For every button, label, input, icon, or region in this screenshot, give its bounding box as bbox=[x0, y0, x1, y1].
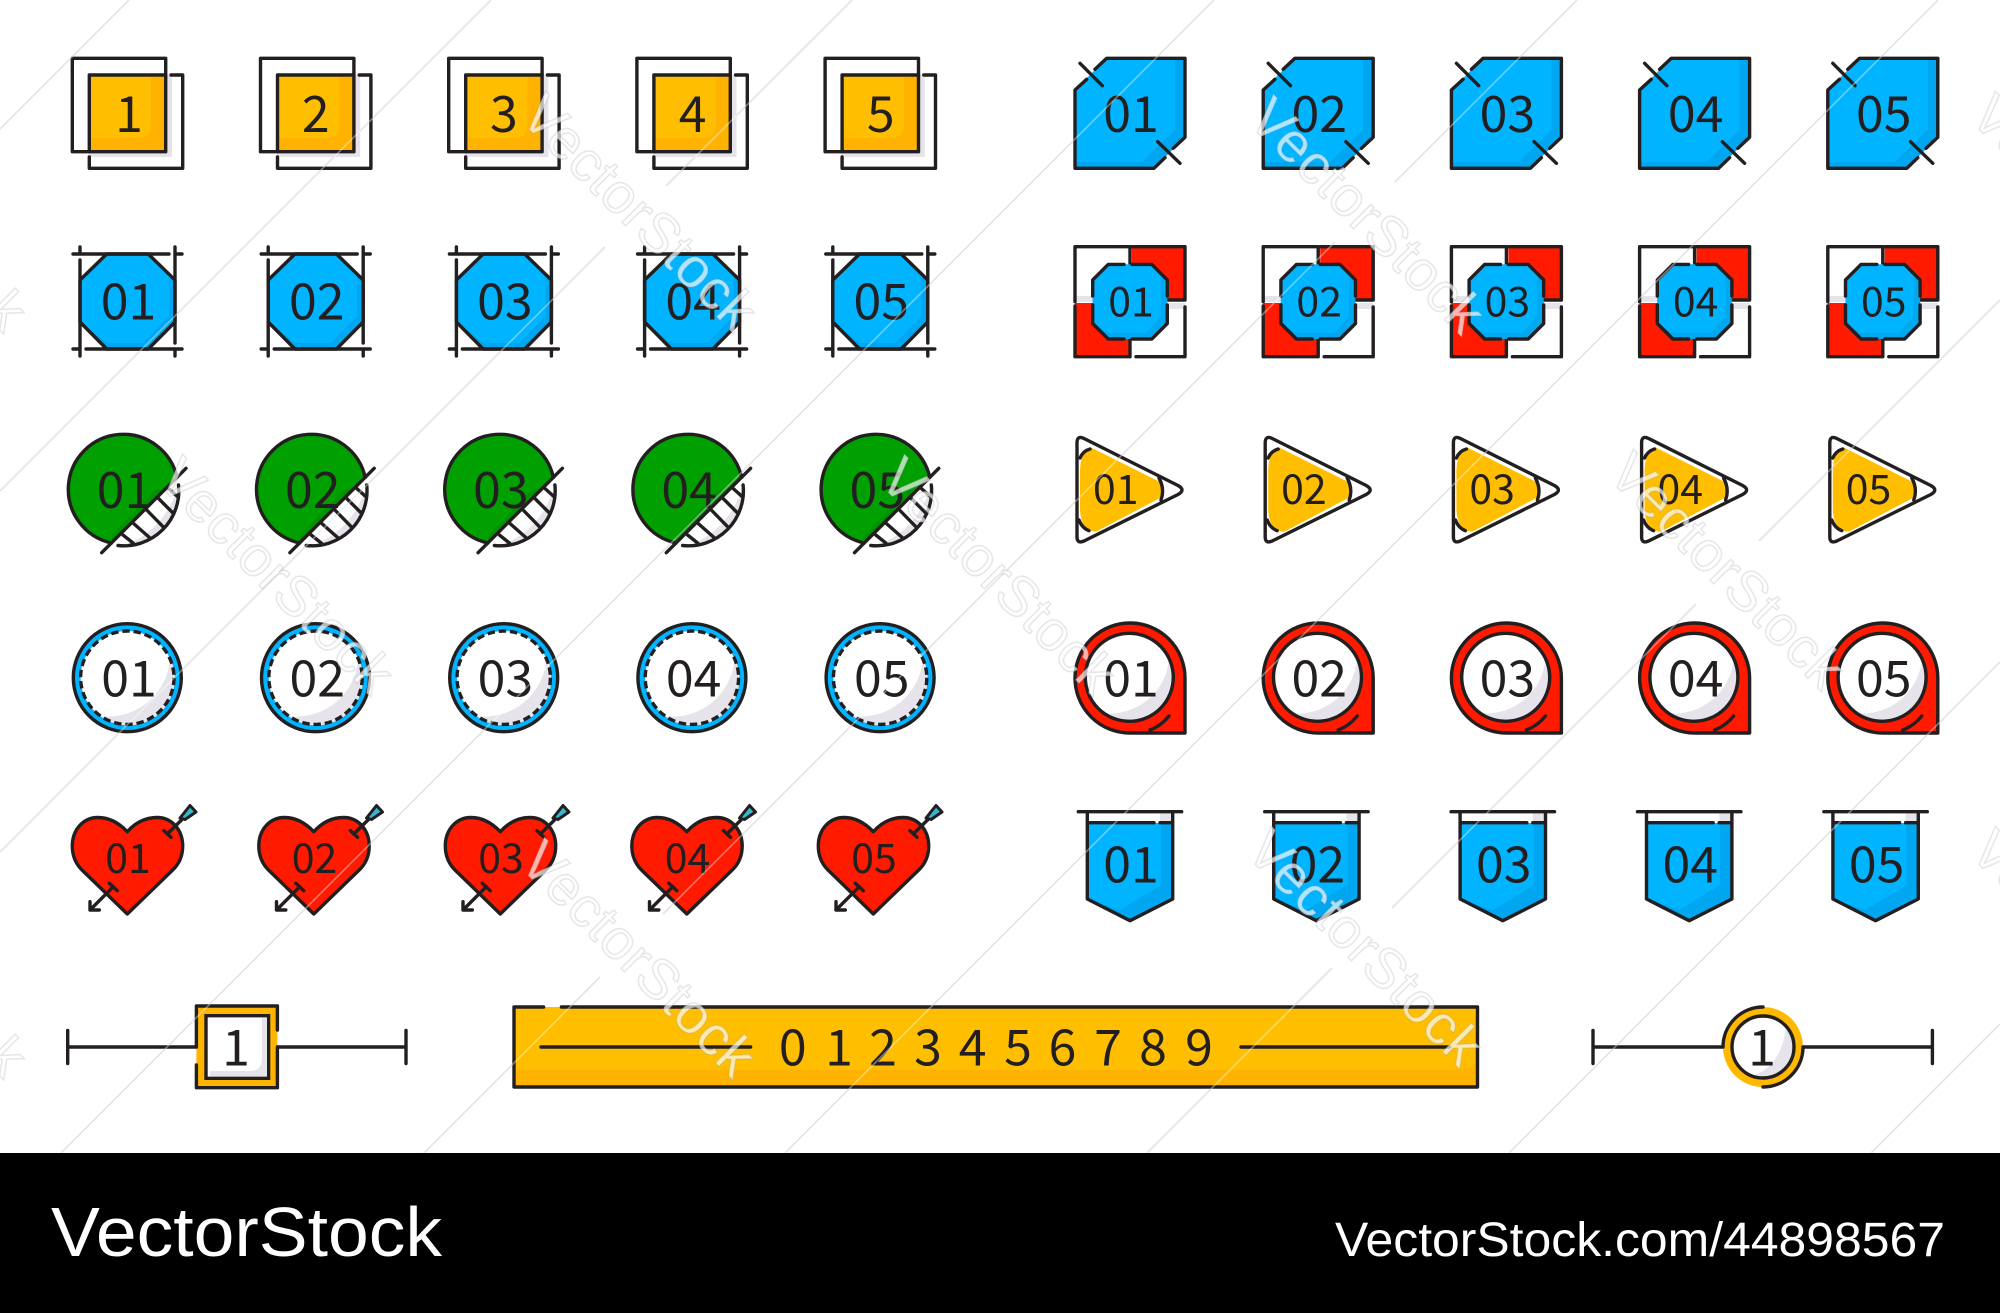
heart 01 bbox=[72, 806, 196, 914]
cut square 04: 04 bbox=[1668, 75, 1723, 147]
dashed circle 04: 04 bbox=[666, 640, 721, 712]
bookmark 05 bbox=[1824, 812, 1927, 921]
quadrant badge 02 bbox=[1263, 247, 1373, 357]
bar: amber digits: 8 bbox=[1139, 1009, 1167, 1081]
badge 5 bbox=[825, 58, 936, 168]
heart 03: 03 bbox=[478, 825, 524, 885]
badge 4: 4 bbox=[679, 75, 706, 147]
quadrant badge 04: 04 bbox=[1673, 268, 1718, 328]
triangle 04: 04 bbox=[1658, 456, 1703, 516]
green circle 02: 02 bbox=[285, 451, 340, 523]
badge 1: 1 bbox=[115, 75, 143, 147]
bar: amber digits: 7 bbox=[1094, 1009, 1122, 1081]
dashed circle 05: 05 bbox=[854, 640, 910, 712]
bookmark 02: 02 bbox=[1290, 825, 1345, 897]
panel: dashed blue circles bbox=[73, 624, 934, 732]
quadrant badge 03: 03 bbox=[1485, 268, 1530, 328]
badge 2: 2 bbox=[302, 75, 330, 147]
cut square 02: 02 bbox=[1291, 75, 1347, 147]
badge 2 bbox=[260, 58, 371, 168]
dashed circle 03: 03 bbox=[478, 640, 533, 712]
bar: amber digits: 1 bbox=[825, 1009, 853, 1081]
footer image id: VectorStock.com/44898567 bbox=[1335, 1214, 1945, 1267]
triangle 01: 01 bbox=[1093, 456, 1138, 516]
heart 05: 05 bbox=[851, 825, 897, 885]
dashed circle 03 bbox=[450, 624, 558, 732]
heart 03 bbox=[445, 806, 569, 914]
cut square 01 bbox=[1075, 58, 1185, 168]
heart 04: 04 bbox=[665, 825, 710, 885]
badge 3 bbox=[449, 58, 559, 168]
watermarks: VectorStock bbox=[1598, 440, 1858, 701]
dashed circle 01: 01 bbox=[101, 640, 157, 712]
pin 01 bbox=[1075, 623, 1185, 733]
badge 4 bbox=[637, 58, 747, 168]
badge 5: 5 bbox=[867, 75, 895, 147]
panel: amber triangles bbox=[1077, 437, 1935, 542]
green circle 05 bbox=[821, 434, 939, 553]
triangle 05: 05 bbox=[1846, 456, 1891, 516]
watermarks: VectorStock bbox=[1236, 817, 1496, 1078]
pin 03 bbox=[1451, 623, 1561, 733]
octagon 05: 05 bbox=[854, 262, 909, 334]
quadrant badge 03 bbox=[1451, 247, 1561, 357]
triangle 04 bbox=[1642, 437, 1747, 542]
triangle 05 bbox=[1830, 437, 1935, 542]
bar: amber digits bbox=[514, 1007, 1478, 1087]
triangle 02: 02 bbox=[1281, 456, 1327, 516]
panel: red hearts with arrows bbox=[72, 806, 942, 914]
pin 05: 05 bbox=[1856, 640, 1912, 712]
pin 02: 02 bbox=[1291, 640, 1347, 712]
cut square 04 bbox=[1640, 58, 1750, 168]
green circle 05: 05 bbox=[850, 451, 905, 523]
badge 3: 3 bbox=[490, 75, 518, 147]
cut square 03: 03 bbox=[1480, 75, 1535, 147]
cut square 01: 01 bbox=[1103, 75, 1159, 147]
panel: amber square badges bbox=[72, 58, 936, 168]
bookmark 03: 03 bbox=[1476, 825, 1532, 897]
slider: round handle: 1 bbox=[1748, 1009, 1776, 1081]
panel: red quadrant octagons bbox=[1075, 247, 1938, 357]
octagon 04 bbox=[638, 247, 747, 356]
heart 02: 02 bbox=[292, 825, 337, 885]
bookmark 01: 01 bbox=[1103, 825, 1159, 897]
quadrant badge 01: 01 bbox=[1108, 268, 1154, 328]
slider: round handle bbox=[1593, 1007, 1932, 1087]
octagon 05 bbox=[826, 247, 935, 356]
bookmark 01 bbox=[1078, 812, 1182, 921]
pin 05 bbox=[1828, 623, 1938, 733]
heart 04 bbox=[632, 806, 756, 914]
heart 05 bbox=[818, 806, 942, 914]
footer bar bbox=[0, 1153, 2000, 1313]
watermarks: VectorStock bbox=[509, 828, 769, 1089]
green circle 01: 01 bbox=[97, 451, 152, 523]
bar: amber digits: 3 bbox=[914, 1009, 942, 1081]
dashed circle 04 bbox=[638, 624, 746, 732]
watermarks bbox=[0, 82, 2000, 1089]
pin 01: 01 bbox=[1103, 640, 1159, 712]
bar: amber digits: 0 bbox=[779, 1009, 807, 1081]
triangle 03: 03 bbox=[1469, 456, 1515, 516]
watermarks: VectorStock bbox=[510, 82, 770, 343]
octagon 04: 04 bbox=[665, 262, 721, 334]
octagon 02: 02 bbox=[289, 262, 344, 334]
footer brand: VectorStock bbox=[51, 1193, 443, 1271]
green circle 03 bbox=[445, 434, 562, 553]
octagon 02 bbox=[261, 247, 370, 356]
cut square 05: 05 bbox=[1856, 75, 1912, 147]
green circle 03: 03 bbox=[473, 451, 529, 523]
slider: square handle bbox=[68, 1006, 406, 1088]
octagon 03 bbox=[449, 247, 558, 356]
watermarks: VectorStock bbox=[1238, 85, 1498, 346]
bookmark 03 bbox=[1451, 812, 1554, 921]
bar: amber digits: 2 bbox=[869, 1009, 897, 1081]
panel: blue octagon badges bbox=[73, 247, 935, 356]
quadrant badge 02: 02 bbox=[1296, 268, 1342, 328]
cut square 03 bbox=[1451, 58, 1561, 168]
slider: square handle: 1 bbox=[222, 1009, 250, 1081]
octagon 03: 03 bbox=[477, 262, 533, 334]
heart 01: 01 bbox=[105, 825, 151, 885]
watermarks: VectorStock bbox=[147, 445, 407, 706]
pin 02 bbox=[1263, 623, 1373, 733]
panel: red pins bbox=[1075, 623, 1938, 733]
pin 04 bbox=[1640, 623, 1750, 733]
panel: blue cut-corner squares bbox=[1075, 58, 1938, 168]
watermarks: VectorStock bbox=[869, 445, 1129, 706]
cut square 02 bbox=[1263, 58, 1373, 168]
panel: blue bookmarks bbox=[1078, 812, 1927, 921]
quadrant badge 05: 05 bbox=[1861, 268, 1907, 328]
quadrant badge 05 bbox=[1828, 247, 1938, 357]
badge 1 bbox=[72, 58, 183, 168]
octagon 01: 01 bbox=[101, 262, 156, 334]
bar: amber digits: 9 bbox=[1185, 1009, 1213, 1081]
bookmark 04: 04 bbox=[1662, 825, 1718, 897]
heart 02 bbox=[259, 806, 382, 914]
dashed circle 05 bbox=[826, 624, 934, 732]
bar: amber digits: 4 bbox=[959, 1009, 986, 1081]
pin 04: 04 bbox=[1668, 640, 1723, 712]
triangle 01 bbox=[1077, 437, 1182, 542]
bookmark 05: 05 bbox=[1849, 825, 1904, 897]
bar: amber digits: 5 bbox=[1004, 1009, 1032, 1081]
octagon 01 bbox=[73, 247, 182, 356]
quadrant badge 01 bbox=[1075, 247, 1185, 357]
green circle 02 bbox=[257, 434, 374, 553]
green circle 01 bbox=[68, 434, 186, 553]
pin 03: 03 bbox=[1480, 640, 1535, 712]
panel: green split circles bbox=[68, 434, 939, 553]
triangle 03 bbox=[1453, 437, 1558, 542]
cut square 05 bbox=[1828, 58, 1938, 168]
green circle 04 bbox=[633, 434, 751, 553]
dashed circle 02: 02 bbox=[289, 640, 345, 712]
bar: amber digits: 6 bbox=[1049, 1009, 1076, 1081]
dashed circle 01 bbox=[73, 624, 181, 732]
dashed circle 02 bbox=[262, 624, 370, 732]
quadrant badge 04 bbox=[1640, 247, 1750, 357]
bookmark 02 bbox=[1265, 812, 1368, 921]
green circle 04: 04 bbox=[661, 451, 717, 523]
bookmark 04 bbox=[1638, 812, 1741, 921]
triangle 02 bbox=[1265, 437, 1370, 542]
